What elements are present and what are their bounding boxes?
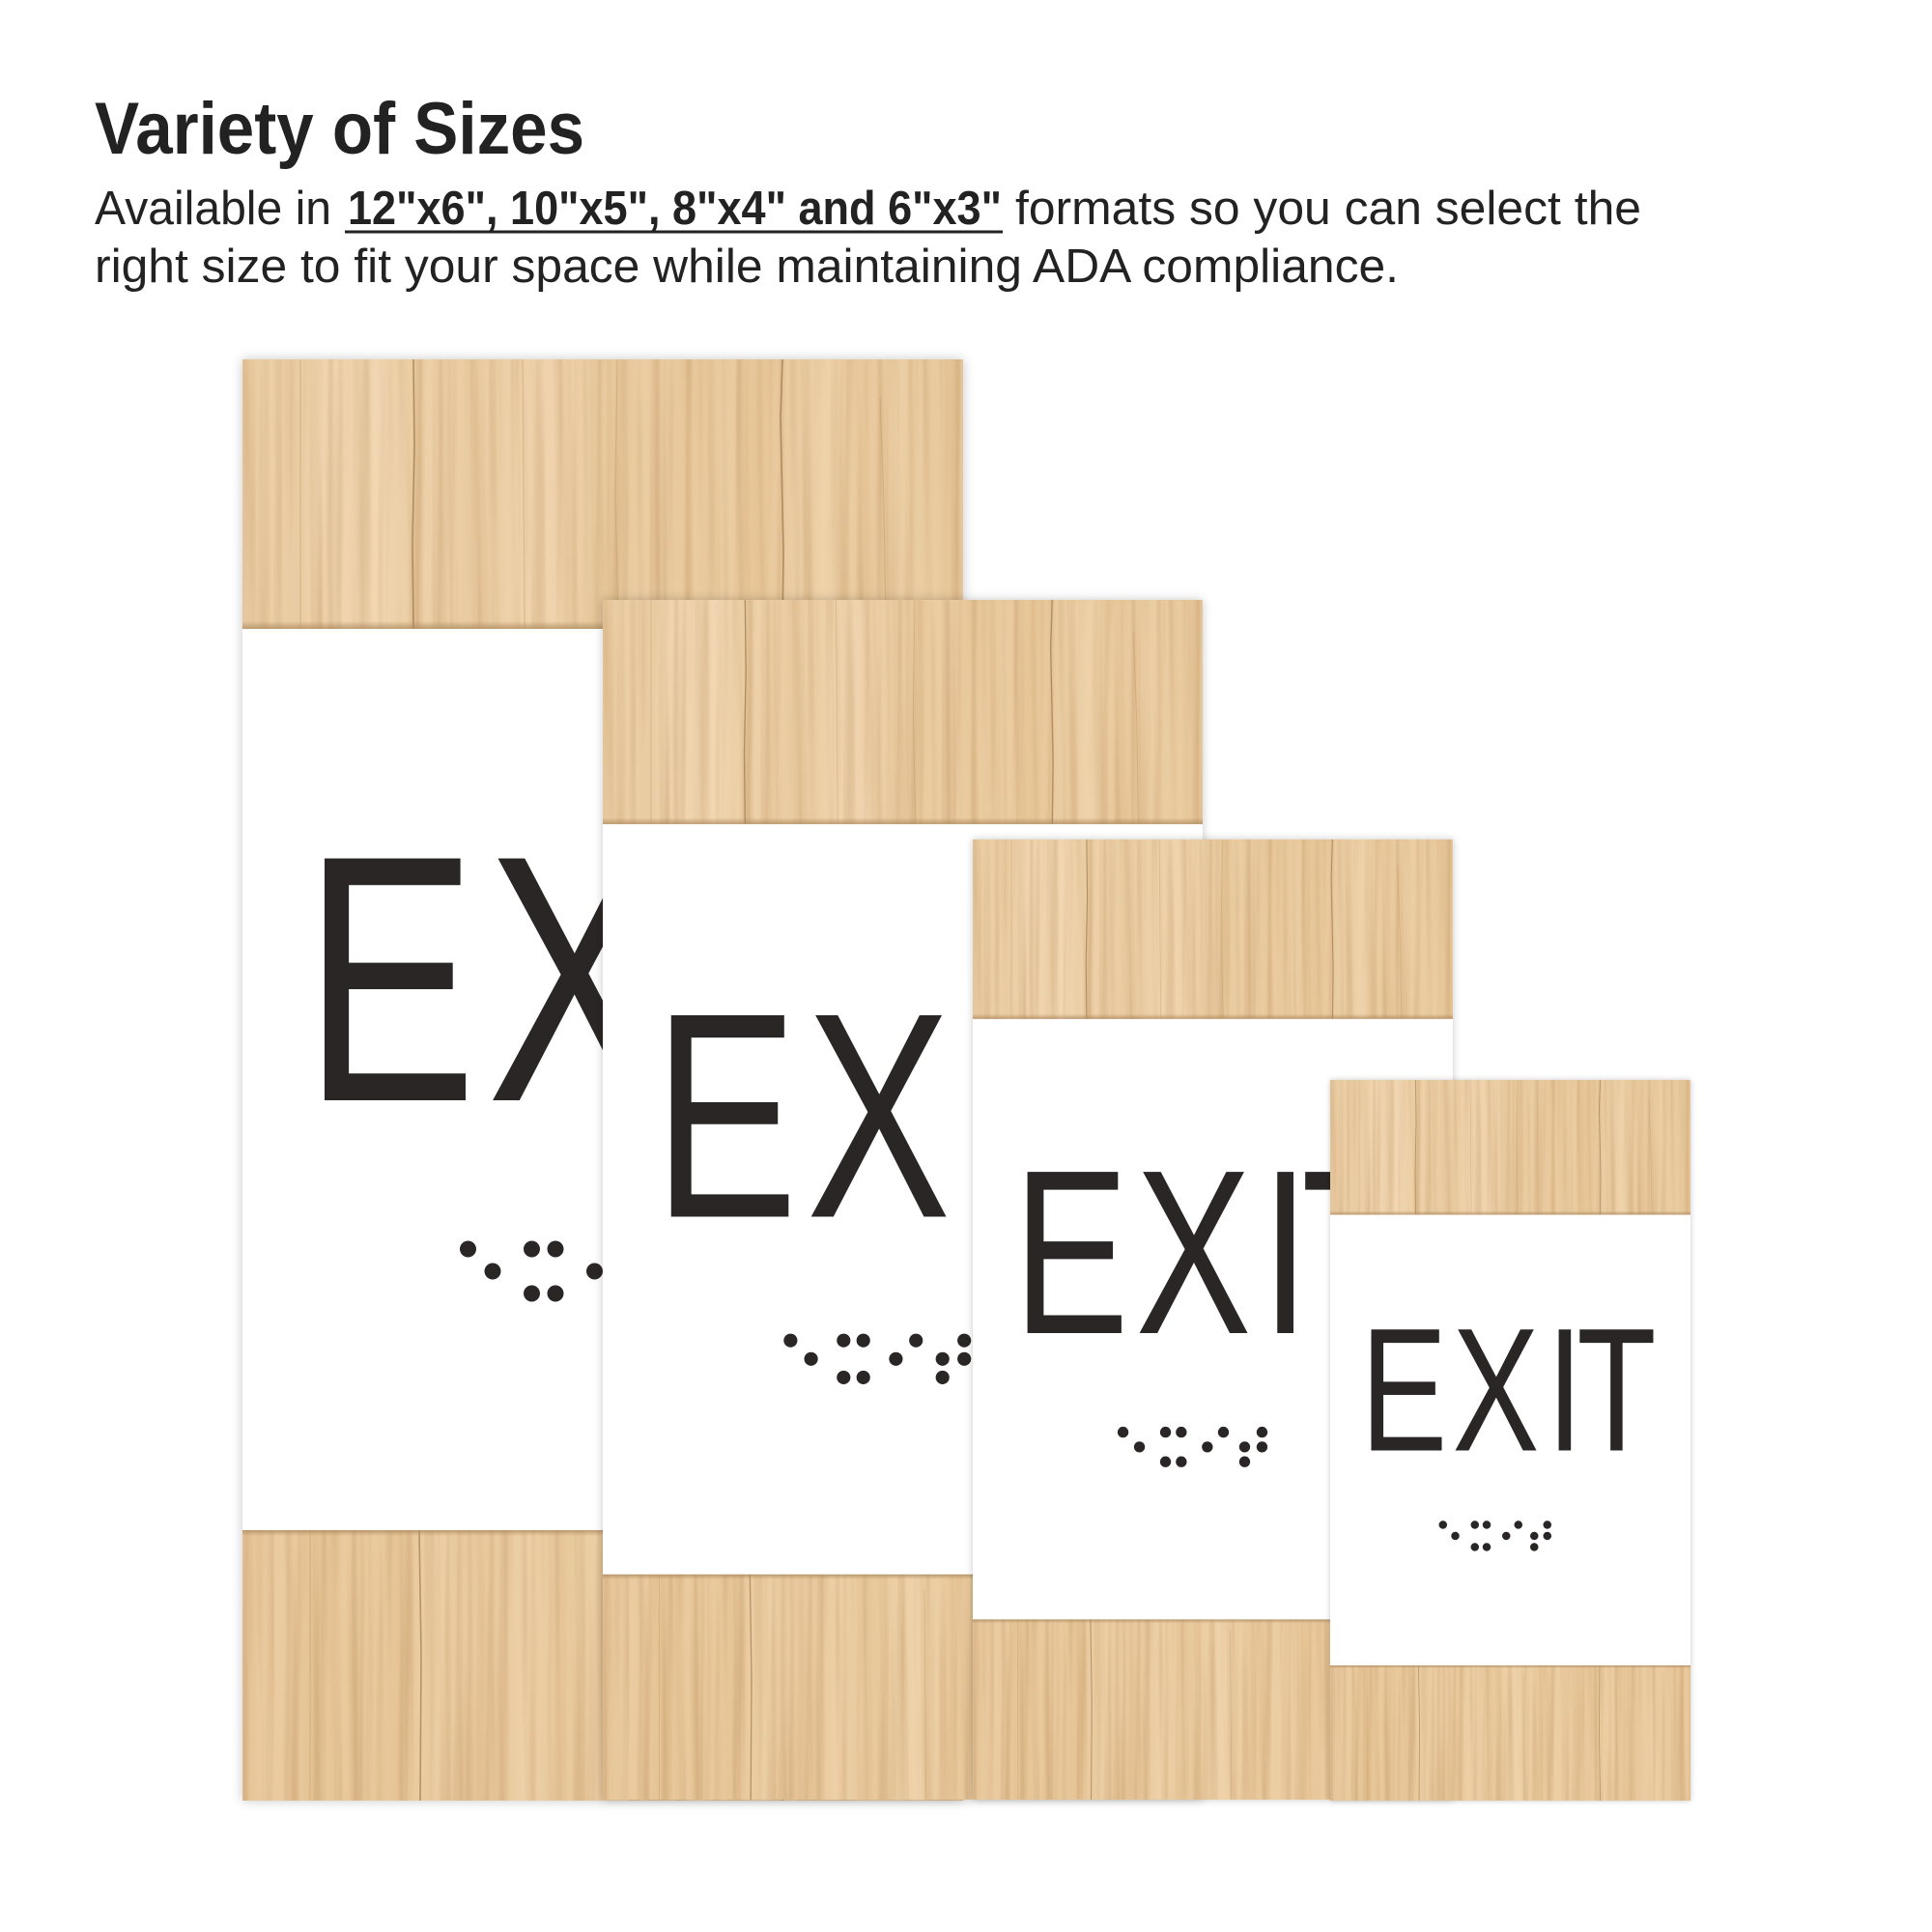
description text block: right size to fit your space while maintaining ADA compliance. bbox=[95, 241, 1399, 293]
sign: 8 x 4: EXIT bbox=[1013, 1122, 1407, 1383]
sign: 8 x 4 bbox=[973, 839, 1453, 1800]
sign: 12 x 6 bbox=[242, 359, 963, 1801]
sign: 6 x 3 bbox=[1330, 1080, 1690, 1801]
description text block bbox=[95, 183, 1641, 293]
sign: 12 x 6: EXIT bbox=[303, 781, 895, 1175]
description text block: Available in bbox=[95, 183, 331, 235]
title: Variety of Sizes bbox=[95, 88, 584, 170]
description text block: 12"x6", 10"x5", 8"x4" and 6"x3" bbox=[348, 183, 1002, 235]
sign: 10 x 5 bbox=[603, 600, 1203, 1800]
sign: 6 x 3: EXIT bbox=[1360, 1292, 1657, 1488]
description text block: formats so you can select the bbox=[1015, 183, 1641, 235]
sign: 10 x 5: EXIT bbox=[653, 953, 1146, 1279]
